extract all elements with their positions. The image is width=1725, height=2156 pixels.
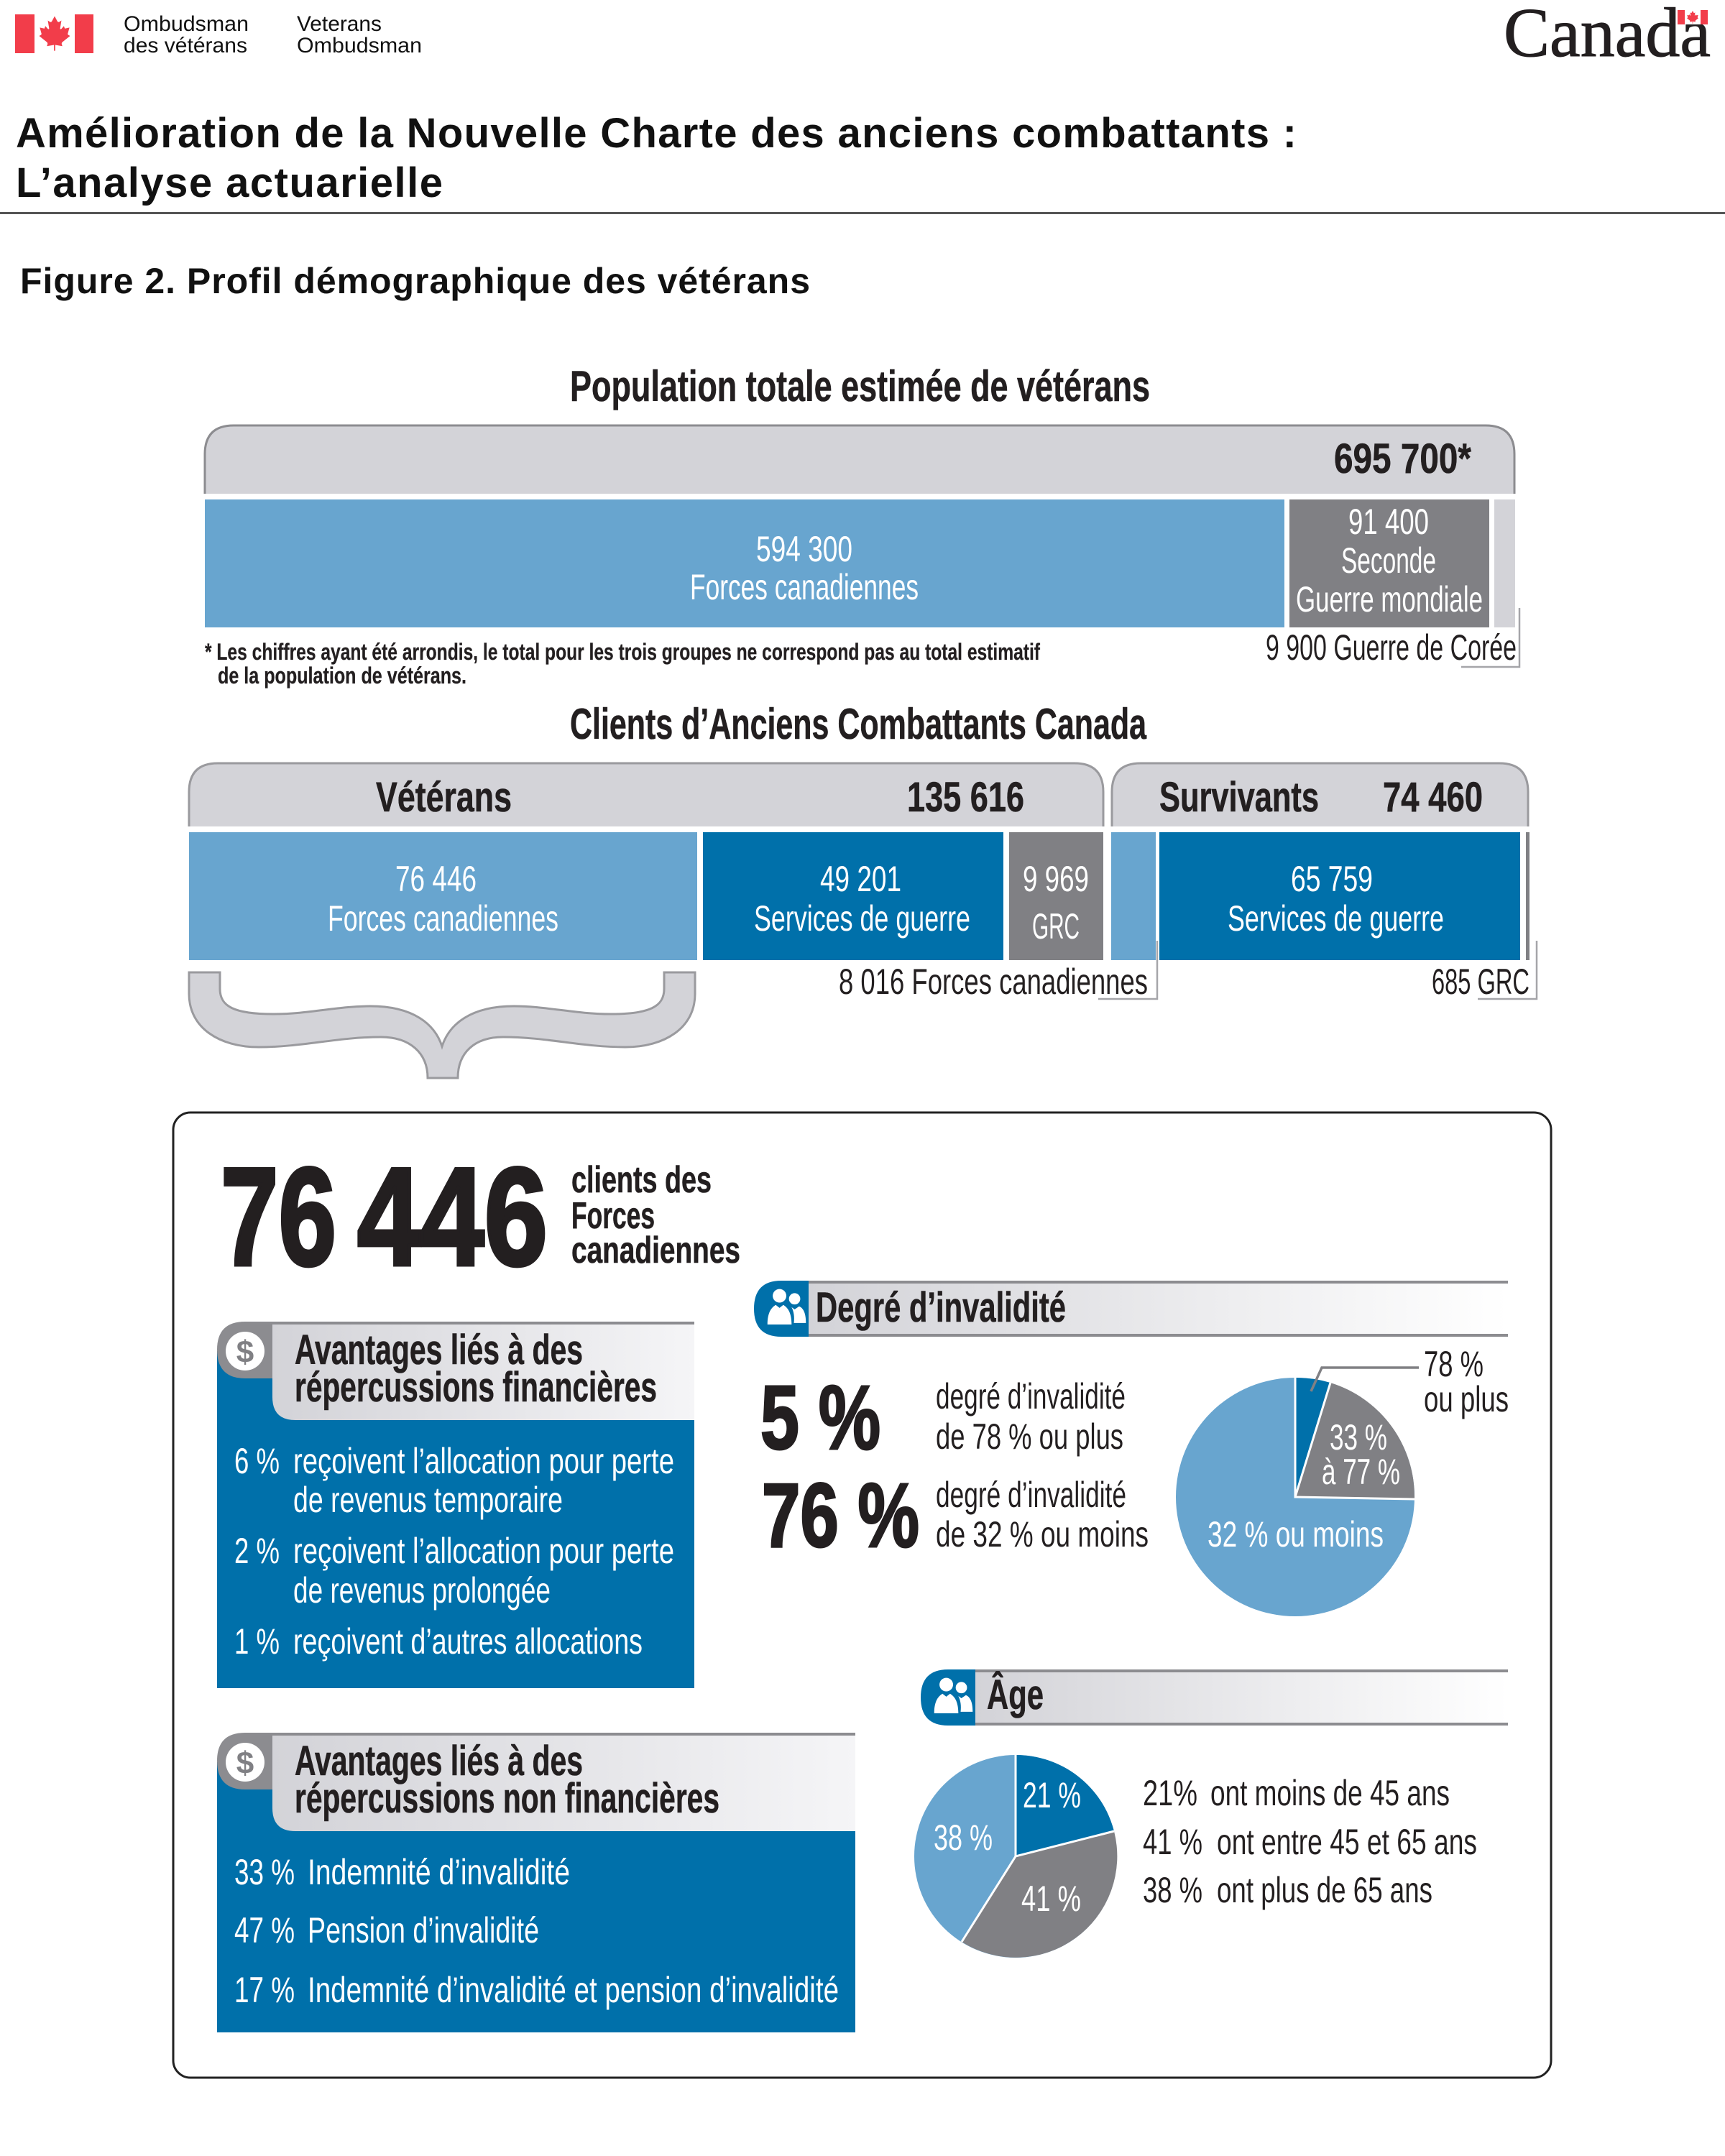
header: Âge: Âge bbox=[987, 1672, 1044, 1718]
segment: vétérans Forces canadiennes bbox=[189, 832, 697, 960]
segment: Forces canadiennes 594 300: Forces canadiennes bbox=[690, 567, 919, 607]
segment: Forces canadiennes 594 300: 594 300 bbox=[756, 529, 852, 569]
segment: vétérans Forces canadiennes: 76 446 bbox=[395, 859, 477, 899]
title: Amélioration de la Nouvelle Charte des anciens combattants : bbox=[16, 110, 1297, 157]
segment: survivants Services de guerre: Services de guerre bbox=[1228, 898, 1444, 939]
logo: flag and ombudsman wordmark: Ombudsman bbox=[297, 34, 422, 57]
pie chart: âge: 38 % bbox=[934, 1818, 993, 1858]
panel: avantages financiers: 1 % bbox=[234, 1621, 280, 1662]
big number 76 446: 76 bbox=[221, 1139, 336, 1295]
heading: population totale: Population totale estimée de vétérans bbox=[570, 362, 1150, 410]
header: avantages non financiers: répercussions non financières bbox=[295, 1775, 719, 1822]
pie label: 78 % ou plus with leader: 78 % bbox=[1424, 1344, 1484, 1384]
legend: âge bbox=[1143, 1773, 1477, 1910]
header bar: Survivants bbox=[1112, 763, 1528, 826]
header bar: Vétérans: Vétérans bbox=[376, 774, 512, 821]
panel: avantages financiers: reçoivent d’autres allocations bbox=[293, 1621, 643, 1662]
brace bbox=[189, 972, 695, 1078]
segment: survivants Services de guerre: 65 759 bbox=[1291, 859, 1373, 899]
figure heading: Figure 2. Profil démographique des vétérans bbox=[20, 261, 810, 301]
segment: vétérans GRC bbox=[1009, 832, 1103, 960]
segment: Seconde Guerre mondiale 91 400: Seconde bbox=[1341, 540, 1436, 581]
stat: 76 %: de 32 % ou moins bbox=[936, 1514, 1149, 1554]
segment: Seconde Guerre mondiale 91 400 bbox=[1289, 499, 1489, 627]
big number 76 446: clients des bbox=[571, 1159, 712, 1201]
header: Âge bbox=[921, 1669, 1508, 1726]
segment: survivants Services de guerre bbox=[1159, 832, 1520, 960]
panel: clients des Forces canadiennes bbox=[173, 1112, 1551, 2078]
header: avantages non financiers: $ bbox=[236, 1746, 254, 1781]
segment: Seconde Guerre mondiale 91 400: 91 400 bbox=[1348, 502, 1429, 542]
big number 76 446: 446 bbox=[357, 1139, 548, 1295]
legend: âge: 41 % bbox=[1143, 1822, 1202, 1862]
segment: vétérans GRC: 9 969 bbox=[1023, 859, 1089, 899]
panel: avantages financiers: de revenus prolongée bbox=[293, 1570, 551, 1611]
legend: âge: ont moins de 45 ans bbox=[1210, 1773, 1450, 1813]
pie chart: degré d’invalidité: à 77 % bbox=[1322, 1452, 1400, 1492]
pie chart: âge: 41 % bbox=[1021, 1879, 1081, 1919]
panel: avantages non financiers: Indemnité d’invalidité et pension d’invalidité bbox=[308, 1970, 839, 2010]
header bar: Survivants: Survivants bbox=[1159, 774, 1319, 821]
header bar: Vétérans bbox=[189, 763, 1103, 826]
heading: clients ACC: Clients d’Anciens Combattants Canada bbox=[570, 700, 1146, 748]
footnote: * Les chiffres ayant été arrondis, le total pour les trois groupes ne correspond pas au total estimatif bbox=[205, 639, 1040, 665]
header: avantages financiers bbox=[217, 1322, 694, 1420]
big number 76 446: Forces bbox=[571, 1195, 655, 1237]
stat: 5 % bbox=[760, 1367, 1126, 1468]
pie label: 78 % ou plus with leader bbox=[1311, 1344, 1509, 1419]
panel: avantages non financiers: Indemnité d’invalidité bbox=[308, 1852, 570, 1892]
segment: Guerre de Corée with leader: 9 900 Guerre de Corée bbox=[1266, 627, 1517, 668]
panel: avantages non financiers: Pension d’invalidité bbox=[308, 1910, 539, 1950]
pie label: 78 % ou plus with leader: ou plus bbox=[1424, 1379, 1509, 1419]
panel: avantages financiers: reçoivent l’allocation pour perte bbox=[293, 1441, 674, 1481]
segment: Guerre de Corée with leader bbox=[1266, 499, 1519, 668]
stat: 76 %: 76 % bbox=[762, 1465, 919, 1566]
panel: avantages financiers bbox=[217, 1322, 694, 1688]
panel: avantages non financiers: 33 % bbox=[234, 1852, 295, 1892]
pie chart: degré d’invalidité: 33 % bbox=[1330, 1417, 1387, 1457]
legend: âge: ont plus de 65 ans bbox=[1217, 1870, 1432, 1910]
header: Degré d’invalidité bbox=[754, 1281, 1508, 1337]
segment: vétérans GRC: GRC bbox=[1032, 906, 1080, 946]
stat: 76 %: degré d’invalidité bbox=[936, 1475, 1126, 1515]
footnote bbox=[205, 639, 1040, 688]
segment: Seconde Guerre mondiale 91 400: Guerre mondiale bbox=[1296, 579, 1483, 619]
header bar: Vétérans: 135 616 bbox=[907, 774, 1024, 821]
panel: avantages financiers: 6 % bbox=[234, 1441, 280, 1481]
legend: âge: 38 % bbox=[1143, 1870, 1202, 1910]
header: avantages non financiers bbox=[217, 1733, 855, 1831]
stat: 5 %: 5 % bbox=[760, 1367, 880, 1468]
panel: avantages financiers: 2 % bbox=[234, 1531, 280, 1571]
header: avantages non financiers: Avantages liés à des bbox=[295, 1738, 583, 1784]
pie chart: degré d’invalidité bbox=[1176, 1378, 1414, 1616]
pie chart: âge: 21 % bbox=[1023, 1775, 1081, 1815]
panel: avantages non financiers: 17 % bbox=[234, 1970, 295, 2010]
logo: flag and ombudsman wordmark bbox=[15, 12, 422, 57]
panel: avantages non financiers bbox=[217, 1733, 855, 2032]
segment: survivants Forces canadiennes with leader bbox=[839, 832, 1157, 1002]
pie chart: degré d’invalidité: 32 % ou moins bbox=[1208, 1514, 1384, 1554]
total population bar bbox=[205, 425, 1514, 494]
segment: Forces canadiennes 594 300 bbox=[205, 499, 1284, 627]
footnote: de la population de vétérans. bbox=[218, 663, 466, 688]
logo: flag and ombudsman wordmark: Veterans bbox=[297, 12, 382, 36]
logo: flag and ombudsman wordmark: des vétérans bbox=[124, 34, 247, 57]
logo: flag and ombudsman wordmark: Ombudsman bbox=[124, 12, 249, 36]
legend: âge: 21% bbox=[1143, 1773, 1197, 1813]
segment: survivants GRC with leader bbox=[1432, 832, 1537, 1002]
total population bar: 695 700* bbox=[1334, 436, 1471, 482]
title bbox=[16, 110, 1297, 206]
header bar: Survivants: 74 460 bbox=[1383, 774, 1483, 821]
panel: avantages financiers: reçoivent l’allocation pour perte bbox=[293, 1531, 674, 1571]
pie chart: âge bbox=[914, 1755, 1117, 1958]
header: avantages financiers: $ bbox=[236, 1335, 254, 1370]
panel: avantages non financiers: 47 % bbox=[234, 1910, 295, 1950]
panel: avantages financiers: de revenus temporaire bbox=[293, 1480, 563, 1520]
segment: survivants GRC with leader: 685 GRC bbox=[1432, 962, 1530, 1002]
stat: 5 %: degré d’invalidité bbox=[936, 1376, 1126, 1416]
legend: âge: ont entre 45 et 65 ans bbox=[1217, 1822, 1477, 1862]
segment: vétérans Services de guerre: 49 201 bbox=[820, 859, 901, 899]
stat: 76 % bbox=[762, 1465, 1149, 1566]
header: avantages financiers: répercussions financières bbox=[295, 1364, 657, 1411]
segment: vétérans Forces canadiennes: Forces canadiennes bbox=[328, 898, 558, 939]
header: avantages financiers: Avantages liés à des bbox=[295, 1327, 583, 1373]
big number 76 446 bbox=[221, 1139, 740, 1295]
stat: 5 %: de 78 % ou plus bbox=[936, 1416, 1123, 1457]
segment: vétérans Services de guerre: Services de guerre bbox=[754, 898, 970, 939]
segment: vétérans Services de guerre bbox=[703, 832, 1003, 960]
big number 76 446: canadiennes bbox=[571, 1230, 740, 1271]
header: Degré d’invalidité: Degré d’invalidité bbox=[816, 1284, 1066, 1331]
segment: survivants Forces canadiennes with leader: 8 016 Forces canadiennes bbox=[839, 962, 1148, 1002]
title: L’analyse actuarielle bbox=[16, 160, 443, 206]
